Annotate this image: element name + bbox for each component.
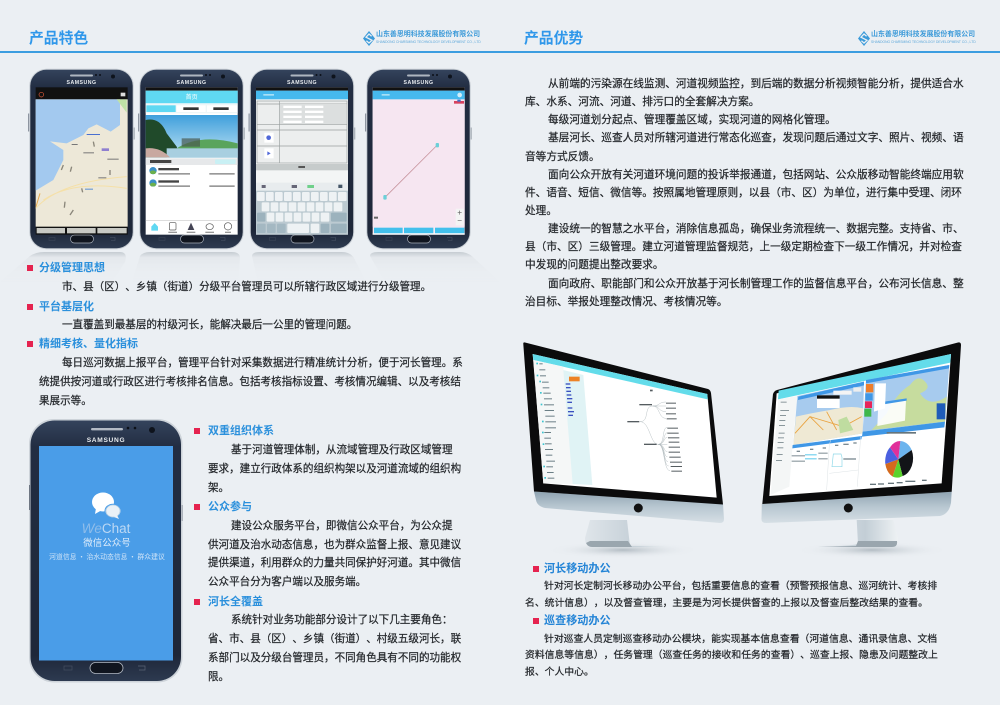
company logo: SHANDONG CHARSMING TECHNOLOGY DEVELOPMENT CO., LTD <box>376 40 481 44</box>
text block: product advantages: 面向公众开放有关河道环境问题的投诉举报通道，包括网站、公众版移动智能终端应用软 <box>548 169 964 181</box>
feature: 公众参与 <box>194 500 461 588</box>
feature: 河长移动办公: 名、统计信息），以及督查管理，主要是为河长提供督查的上报以及督查后整改结果的查看。 <box>525 598 928 609</box>
phone 2: home screen: 首页 <box>186 92 198 101</box>
feature: 双重组织体系: 架。 <box>208 482 229 494</box>
text block: product advantages: 从前端的污染源在线监测、河道视频监控，到后端的数据分析视频智能分析，提供适合水 <box>548 78 964 90</box>
company logo: SHANDONG CHARSMING TECHNOLOGY DEVELOPMENT CO., LTD <box>871 40 976 44</box>
company logo <box>858 30 976 46</box>
feature: 河长全覆盖 <box>194 596 461 683</box>
feature: 公众参与: 提供渠道，利用群众的力量共同保护好河道。其中微信 <box>208 557 461 569</box>
feature: 公众参与: 建设公众服务平台，即微信公众平台，为公众提 <box>231 520 452 532</box>
feature: 精细考核、量化指标: 精细考核、量化指标 <box>39 338 138 350</box>
phone 4: track screen <box>365 69 472 249</box>
text block: product advantages: 基层河长、巡查人员对所辖河道进行常态化巡查，发现问题后通过文字、照片、视频、语 <box>548 132 964 144</box>
right monitor <box>761 342 961 558</box>
phone 2: home screen <box>138 69 245 249</box>
phone 1: map screen <box>28 69 135 249</box>
text block: product advantages: 库、水系、河流、河道、排污口的全套解决方案。 <box>525 96 759 108</box>
text block: product advantages: 面向政府、职能部门和公众开放基于河长制管理工作的监督信息平台，公布河长信息、整 <box>548 278 964 290</box>
brand label: SAMSUNG <box>287 80 317 86</box>
feature: 平台基层化: 平台基层化 <box>39 301 94 313</box>
wechat tagline: 河道信息 • 治水动态信息 • 群众建议 <box>49 551 165 561</box>
text block: product advantages: 治目标、举报处理整改情况、考核情况等。 <box>525 296 727 308</box>
icon: logo diamond <box>858 31 870 46</box>
icon: chat bubbles <box>92 492 121 519</box>
feature: 平台基层化: 一直覆盖到最基层的村级河长，能解决最后一公里的管理问题。 <box>62 319 357 331</box>
feature: 河长全覆盖: 河长全覆盖 <box>208 596 263 608</box>
brand label: SAMSUNG <box>66 80 97 86</box>
feature: 精细考核、量化指标: 统提供按河道或行政区进行考核排名信息。包括考核指标设置、考核情况编辑、以及考核结 <box>39 376 461 388</box>
feature: 双重组织体系: 双重组织体系 <box>208 425 274 437</box>
text block: product advantages: 建设统一的智慧之水平台，消除信息孤岛，确保业务流程统一、数据完整。支持省、市、 <box>548 223 964 235</box>
feature: 巡查移动办公: 报、个人中心。 <box>525 667 594 678</box>
feature: 平台基层化 <box>27 300 357 331</box>
text block: product advantages <box>525 78 964 308</box>
phone 3: form and keyboard screen <box>248 69 355 249</box>
company logo: 山东善思明科技发展股份有限公司 <box>376 31 480 38</box>
feature: 精细考核、量化指标 <box>27 338 463 407</box>
wechat phone <box>29 419 183 682</box>
feature: 巡查移动办公: 巡查移动办公 <box>544 615 611 627</box>
feature: 分级管理思想 <box>27 262 431 293</box>
feature: 河长移动办公 <box>525 562 937 609</box>
left monitor <box>523 342 724 558</box>
feature: 分级管理思想: 市、县（区）、乡镇（街道）分级平台管理员可以所辖行政区域进行分级管理。 <box>62 281 431 293</box>
header: right page <box>524 30 976 46</box>
feature: 河长移动办公: 针对河长定制河长移动办公平台，包括重要信息的查看（预警预报信息、巡河统计、考核排 <box>544 581 937 592</box>
feature: 河长全覆盖: 限。 <box>208 671 229 683</box>
text block: product advantages: 件、语音、短信、微信等。按照属地管理原则，以县（市、区）为单位，进行集中受理、闭环 <box>525 187 962 199</box>
screen <box>39 446 173 660</box>
title: 产品特色: 产品特色 <box>29 30 88 46</box>
feature: 河长全覆盖: 系统针对业务功能部分设计了以下几主要角色： <box>231 614 452 626</box>
company logo: 山东善思明科技发展股份有限公司 <box>871 31 975 38</box>
feature: 精细考核、量化指标: 果展示等。 <box>39 395 92 407</box>
icon: logo diamond <box>363 31 375 46</box>
title: 产品优势: 产品优势 <box>524 30 583 46</box>
wechat subtitle: 微信公众号 <box>83 535 131 549</box>
brand label: SAMSUNG <box>87 437 125 444</box>
text block: product advantages: 处理。 <box>525 205 557 217</box>
feature: 巡查移动办公: 资料信息等信息），任务管理（巡查任务的接收和任务的查看）、巡查上报、隐患及问题整改上 <box>525 650 938 661</box>
feature: 河长全覆盖: 省、市、县（区）、乡镇（街道）、村级五级河长，联 <box>208 633 461 645</box>
feature: 精细考核、量化指标: 每日巡河数据上报平台，管理平台针对采集数据进行精准统计分析，便于河长管理。系 <box>62 357 463 369</box>
feature: 公众参与: 公众参与 <box>208 501 252 513</box>
feature: 分级管理思想: 分级管理思想 <box>39 262 105 274</box>
text block: product advantages: 音等方式反馈。 <box>525 151 600 163</box>
feature: 巡查移动办公 <box>525 614 938 678</box>
phone reflections <box>0 252 500 282</box>
brand label: SAMSUNG <box>403 80 434 86</box>
company logo <box>363 30 481 46</box>
feature: 公众参与: 公众平台分为客户端以及服务端。 <box>208 576 366 588</box>
feature: 巡查移动办公: 针对巡查人员定制巡查移动办公模块，能实现基本信息查看（河道信息、通讯录信息、文档 <box>544 634 937 645</box>
feature: 河长全覆盖: 系部门以及分级台管理员，不同角色具有不同的功能权 <box>208 652 461 664</box>
feature: 双重组织体系: 要求，建立行政体系的组织构架以及河道流域的组织构 <box>208 463 461 475</box>
wechat wordmark: WeChat <box>82 521 131 536</box>
feature: 公众参与: 供河道及治水动态信息，也为群众监督上报、意见建议 <box>208 539 461 551</box>
text block: product advantages: 每级河道划分起点、管理覆盖区域，实现河道的网格化管理。 <box>548 114 836 126</box>
text block: product advantages: 中发现的问题提出整改要求。 <box>525 259 664 271</box>
header: left page <box>29 30 481 46</box>
feature: 河长移动办公: 河长移动办公 <box>544 563 611 575</box>
brand label: SAMSUNG <box>176 80 207 86</box>
feature: 双重组织体系 <box>194 424 461 494</box>
feature: 双重组织体系: 基于河道管理体制，从流域管理及行政区域管理 <box>231 444 452 456</box>
text block: product advantages: 县（市、区）三级管理。建立河道管理监督规范，上一级定期检查下一级工作情况，并对检查 <box>525 241 962 253</box>
